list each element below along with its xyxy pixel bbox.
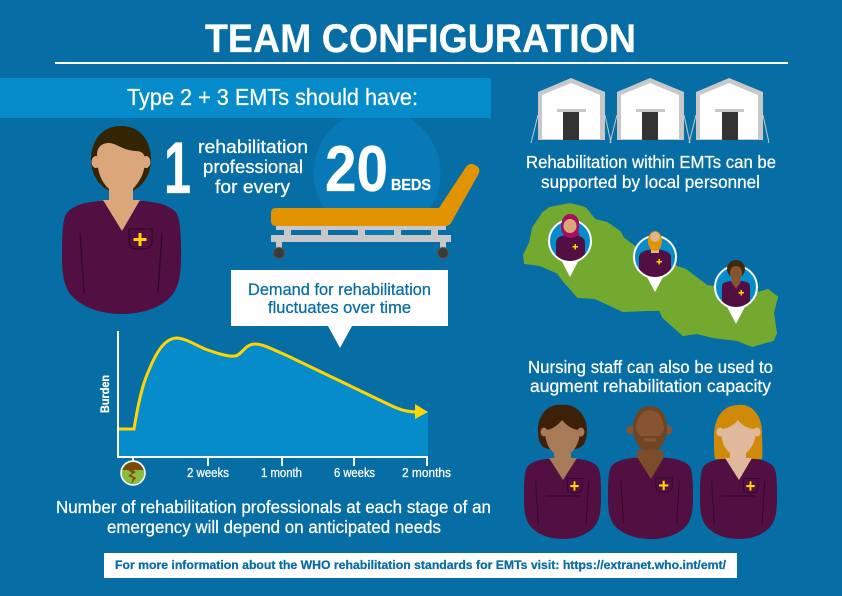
map pin: woman in headscarf: [549, 214, 591, 277]
area chart: burden over time: 2 months: [402, 466, 451, 480]
text: number of professionals: [56, 497, 491, 537]
callout: demand fluctuates: fluctuates over time: [268, 298, 411, 317]
footer: more information: For more information about the WHO rehabilitation standards for EMTs visit: https://extranet.who.int/emt/: [115, 558, 727, 572]
text: local personnel: Rehabilitation within EMTs can be: [526, 152, 776, 172]
ratio text: 1 rehabilitation professional for every: for every: [215, 177, 290, 197]
footer: more information: [104, 553, 737, 578]
area chart: burden over time: 2 weeks: [187, 466, 229, 480]
ratio text: 1 rehabilitation professional for every: professional: [203, 157, 303, 177]
text: nursing staff: augment rehabilitation capacity: [530, 376, 771, 396]
panel: sub-heading band: Type 2 + 3 EMTs should have:: [127, 84, 418, 110]
icon: nurse 1: [524, 405, 601, 539]
area chart: burden over time: 1 month: [261, 466, 302, 480]
icon: nurse 2: [608, 406, 693, 539]
map pin: bearded man: [634, 231, 676, 292]
area chart: burden over time: [98, 331, 451, 480]
text: number of professionals: Number of rehabilitation professionals at each stage of an: [56, 497, 491, 517]
ratio text: 20 beds: 20: [325, 132, 388, 205]
ratio text: 1 rehabilitation professional for every: rehabilitation: [198, 137, 308, 157]
area chart: burden over time: Burden: [98, 375, 112, 413]
ratio text: 20 beds: [325, 132, 431, 205]
map pin: woman with dark hair: [715, 260, 757, 324]
map: Nepal: [524, 204, 777, 346]
text: number of professionals: emergency will depend on anticipated needs: [107, 517, 441, 537]
highlight circle behind bed: [314, 110, 440, 236]
ratio text: 1 rehabilitation professional for every: [164, 128, 308, 209]
title: TEAM CONFIGURATION: [205, 17, 636, 61]
callout: demand fluctuates: Demand for rehabilitation: [248, 280, 431, 299]
icon: earthquake: [121, 461, 145, 485]
area chart: burden over time: 6 weeks: [334, 466, 375, 480]
icon: rehabilitation professional: [62, 126, 181, 314]
icon: hospital bed: [271, 164, 480, 258]
text: local personnel: supported by local personnel: [541, 172, 760, 192]
ratio text: 20 beds: BEDS: [391, 177, 431, 194]
text: nursing staff: [528, 357, 773, 396]
icon: nurse 3: [700, 405, 777, 539]
icon: tent 3: [689, 78, 769, 143]
text: local personnel: [526, 152, 776, 192]
callout: demand fluctuates: [231, 270, 448, 348]
icon: tent 2: [610, 78, 690, 143]
ratio text: 1 rehabilitation professional for every: 1: [164, 128, 191, 209]
panel: sub-heading band: [0, 78, 491, 118]
icon: tent 1: [531, 78, 611, 143]
text: nursing staff: Nursing staff can also be used to: [528, 357, 773, 377]
